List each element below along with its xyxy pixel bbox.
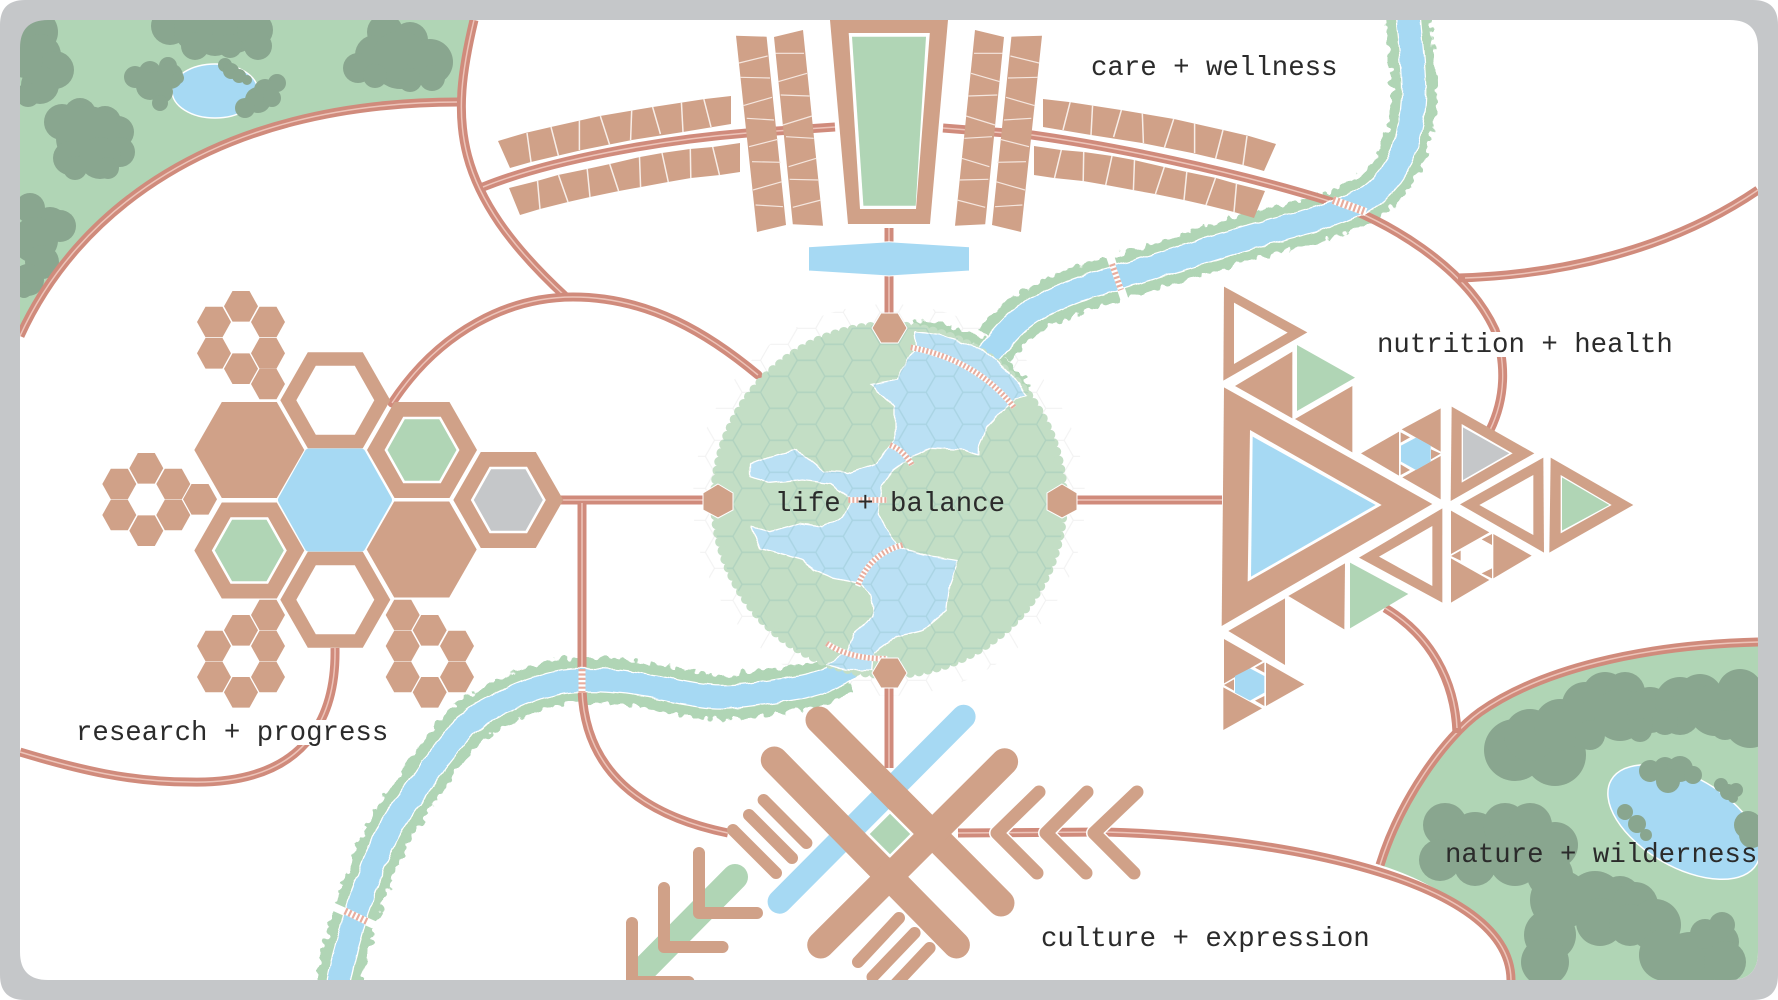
road: centre to care bbox=[884, 228, 894, 320]
blue hexagon cluster: upper bbox=[1361, 408, 1441, 499]
green diamond bbox=[868, 812, 912, 856]
hexagon grid lines bbox=[713, 324, 1065, 676]
label: culture + expression: culture + expression bbox=[1041, 924, 1370, 955]
main blue triangle bbox=[1222, 387, 1432, 626]
footbridge: mid north-east river bbox=[1112, 264, 1121, 290]
right curved rows bbox=[1034, 99, 1276, 218]
river water bbox=[338, 15, 1414, 985]
chevrons: east bbox=[997, 792, 1137, 873]
bank: south-west river bbox=[338, 672, 842, 985]
right building strips bbox=[955, 30, 1042, 232]
white hexagon cluster bbox=[1451, 511, 1532, 603]
road: research to centre bbox=[552, 496, 703, 504]
panel: top-left nature park bbox=[7, 7, 474, 336]
parallel bars: west bbox=[733, 800, 806, 873]
label: care + wellness: care + wellness bbox=[1091, 53, 1338, 84]
green canal bar bbox=[640, 877, 735, 973]
trees bbox=[7, 7, 453, 298]
road: vertical to culture bbox=[582, 503, 728, 833]
road: nutrition to park bbox=[1385, 608, 1457, 733]
green hexagon: upper right bbox=[367, 402, 477, 498]
water lozenge bbox=[808, 242, 970, 276]
bank: spur near south hexagon bbox=[838, 668, 860, 680]
small hexagon cluster: left bbox=[102, 453, 217, 546]
faint hexagon grid around central circle bbox=[693, 304, 1085, 696]
lower ring triangle bbox=[1359, 508, 1442, 603]
water body bbox=[750, 332, 1027, 670]
centre blue hexagon bbox=[282, 453, 388, 547]
label: nature + wilderness: nature + wilderness bbox=[1445, 840, 1757, 871]
label knock-outs behind road crossings bbox=[290, 332, 1516, 745]
road: centre to nutrition bbox=[1077, 496, 1222, 504]
ring hexagon: top bbox=[280, 352, 390, 448]
left curved rows bbox=[498, 96, 740, 215]
river: north-east bbox=[985, 15, 1414, 358]
panel: care + wellness complex bbox=[498, 20, 1276, 276]
central hub: life + balance bbox=[703, 313, 1077, 688]
road: east branch bbox=[1458, 190, 1758, 278]
trees bbox=[1419, 669, 1776, 992]
pond bbox=[172, 64, 258, 118]
river: south-west white edge bbox=[338, 668, 850, 985]
footbridge: road over north-east river bbox=[1333, 200, 1366, 212]
green hexagon: lower left bbox=[194, 502, 304, 598]
panel: culture + expression bbox=[632, 717, 1137, 990]
grey triangle bbox=[1451, 407, 1534, 501]
main crossing bars bbox=[774, 720, 1005, 945]
panel: bottom-right nature park bbox=[1380, 642, 1778, 992]
green ring triangle bbox=[1549, 458, 1633, 553]
footbridge: lower south-west river bbox=[345, 911, 368, 922]
inner footbridges bbox=[827, 347, 1014, 659]
small hexagon cluster: bottom right bbox=[386, 600, 474, 708]
road: top vertical branch bbox=[461, 20, 566, 297]
parallel bars: south bbox=[858, 918, 930, 990]
central courtyard bbox=[830, 20, 948, 224]
label: research + progress: research + progress bbox=[76, 718, 388, 749]
road: care right to nutrition bbox=[943, 128, 1503, 430]
bank: spur along circle right bbox=[998, 338, 1027, 393]
panel: research + progress hexagons bbox=[102, 291, 563, 708]
river: north-east white edge bbox=[985, 15, 1414, 358]
solid triangles bbox=[1228, 352, 1352, 665]
solid hexagon: lower right bbox=[367, 502, 477, 598]
grey hexagon: right bbox=[453, 452, 563, 548]
panel: nutrition + health triangles bbox=[1222, 287, 1633, 730]
hub gate: south bbox=[872, 658, 907, 688]
blue hexagon cluster: lower bbox=[1223, 639, 1304, 730]
river: south-west bbox=[338, 668, 850, 985]
road: south-east park edge bbox=[1380, 642, 1758, 865]
hub gate: north bbox=[872, 313, 907, 343]
road: culture east bbox=[958, 832, 1511, 980]
solid hexagon: upper left bbox=[194, 402, 304, 498]
small hexagon cluster: bottom left bbox=[197, 600, 285, 708]
road: arc from research to centre bbox=[392, 297, 758, 403]
land disc bbox=[715, 326, 1063, 674]
park ground bbox=[1380, 642, 1758, 980]
road: research south-west bbox=[20, 648, 335, 782]
label: nutrition + health: nutrition + health bbox=[1377, 330, 1673, 361]
left building strips bbox=[736, 30, 823, 232]
hub gate: east bbox=[1047, 484, 1077, 518]
footbridge: road over south-west river bbox=[578, 669, 586, 693]
road: north-west park edge bbox=[20, 102, 459, 336]
top ring triangle bbox=[1223, 287, 1307, 381]
chevrons: south-west bbox=[632, 853, 757, 982]
label: life + balance: life + balance bbox=[775, 489, 1005, 520]
bank gaps at footbridges bbox=[325, 244, 1128, 931]
bank: north-east river bbox=[995, 15, 1414, 345]
blue canal bar bbox=[780, 717, 964, 902]
green triangles bbox=[1297, 345, 1408, 628]
ring triangle pointing left bbox=[1460, 458, 1544, 553]
park ground bbox=[20, 20, 474, 336]
road: centre to culture bbox=[884, 680, 894, 768]
ring hexagon: bottom bbox=[280, 552, 390, 648]
small hexagon cluster: top bbox=[197, 291, 285, 399]
bank: spur along circle top bbox=[910, 326, 983, 345]
road: care left bbox=[483, 127, 835, 187]
pond bbox=[1589, 741, 1778, 903]
river banks bbox=[338, 15, 1414, 985]
hub gate: west bbox=[703, 484, 733, 518]
